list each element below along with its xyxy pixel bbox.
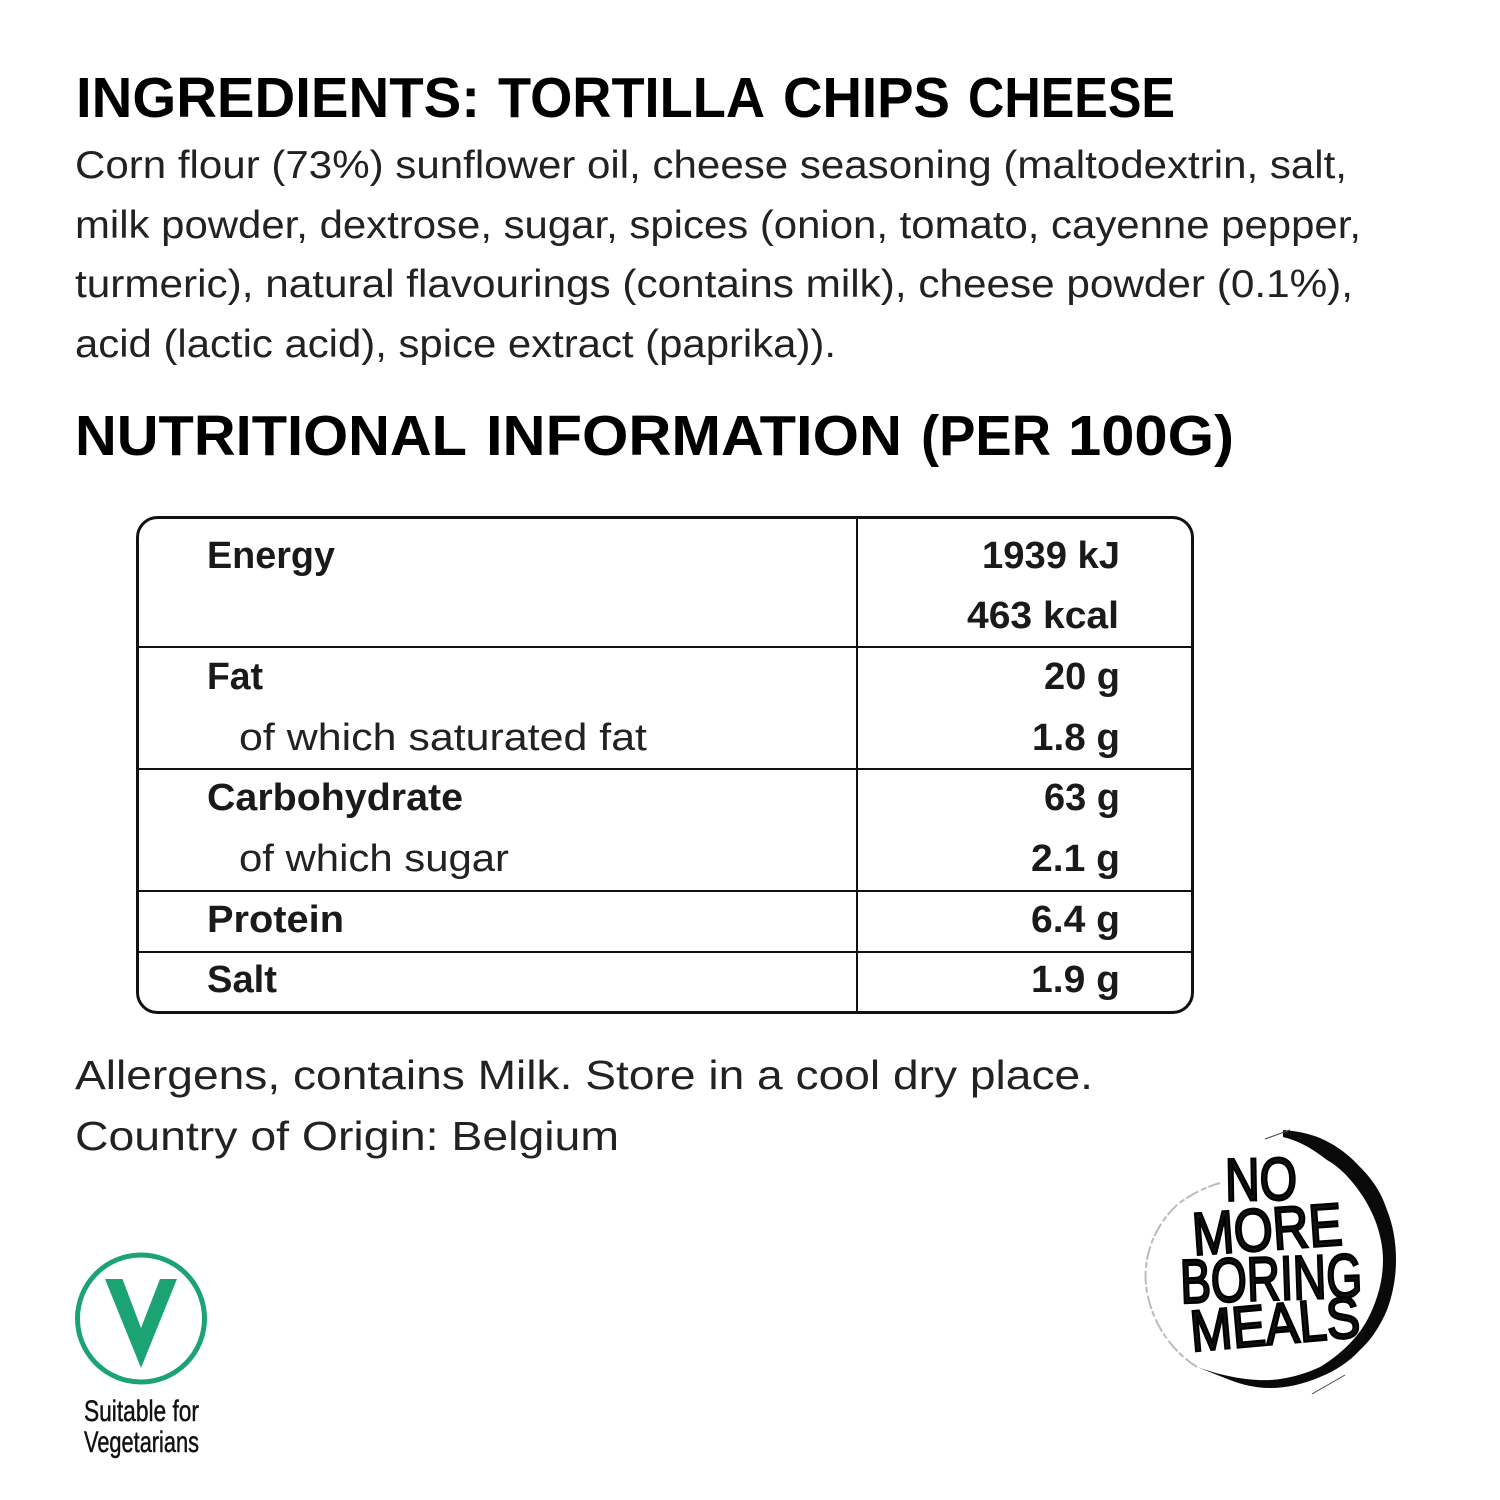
row: carbohydrate xyxy=(207,777,1120,880)
heading: ingredients: TORTILLA xyxy=(498,66,765,130)
heading: ingredients xyxy=(76,66,1175,130)
row: protein: 6.4 g xyxy=(1031,899,1120,941)
row: energy: 463 kcal xyxy=(967,595,1119,637)
text block: ingredients list xyxy=(75,144,1361,366)
row: carbohydrate: Carbohydrate xyxy=(207,777,463,819)
text block: allergens and origin xyxy=(75,1052,1093,1159)
heading: ingredients: INGREDIENTS: xyxy=(76,66,480,130)
icon: suitable for vegetarians xyxy=(78,1255,204,1459)
panel: nutrition table xyxy=(138,518,1192,1012)
row: energy: Energy xyxy=(207,535,335,577)
row: carbohydrate: of which sugar xyxy=(239,838,509,880)
text block: allergens and origin: Allergens, contains Milk. Store in a cool dry place. xyxy=(75,1052,1093,1098)
heading: nutritional information: INFORMATION xyxy=(486,404,902,468)
row: fat xyxy=(207,656,1120,759)
row: fat: 1.8 g xyxy=(1032,717,1120,759)
row: salt: 1.9 g xyxy=(1031,959,1120,1001)
icon: suitable for vegetarians: Suitable for xyxy=(84,1395,199,1428)
text block: ingredients list: turmeric), natural flavourings (contains milk), cheese powder (0.1%), xyxy=(75,263,1353,306)
row: energy xyxy=(207,535,1120,637)
heading: ingredients: CHIPS xyxy=(783,66,950,130)
row: salt xyxy=(207,959,1120,1001)
logo: no more boring meals: MORE xyxy=(1190,1191,1344,1268)
row: carbohydrate: 2.1 g xyxy=(1031,838,1120,880)
heading: nutritional information: NUTRITIONAL xyxy=(75,404,467,468)
row: salt: Salt xyxy=(207,959,277,1001)
logo: no more boring meals: MEALS xyxy=(1187,1285,1362,1364)
icon: suitable for vegetarians: Vegetarians xyxy=(84,1426,199,1459)
heading: ingredients: CHEESE xyxy=(968,66,1175,130)
logo: no more boring meals: BORING xyxy=(1179,1242,1363,1317)
text block: ingredients list: milk powder, dextrose, sugar, spices (onion, tomato, cayenne pepper, xyxy=(75,204,1361,247)
logo: no more boring meals: NO xyxy=(1224,1145,1298,1214)
heading: nutritional information xyxy=(75,404,1234,468)
row: protein xyxy=(207,899,1120,941)
row: fat: Fat xyxy=(207,656,263,698)
heading: nutritional information: 100G) xyxy=(1068,404,1234,468)
row: protein: Protein xyxy=(207,899,344,941)
row: carbohydrate: 63 g xyxy=(1044,777,1120,819)
text block: allergens and origin: Country of Origin: Belgium xyxy=(75,1113,619,1159)
row: fat: of which saturated fat xyxy=(239,717,647,759)
text block: ingredients list: Corn flour (73%) sunflower oil, cheese seasoning (maltodextrin, salt, xyxy=(75,144,1347,187)
text block: ingredients list: acid (lactic acid), spice extract (paprika)). xyxy=(75,323,836,366)
heading: nutritional information: (PER xyxy=(921,404,1051,468)
row: energy: 1939 kJ xyxy=(982,535,1120,577)
logo: no more boring meals xyxy=(1146,1130,1396,1394)
row: fat: 20 g xyxy=(1044,656,1120,698)
